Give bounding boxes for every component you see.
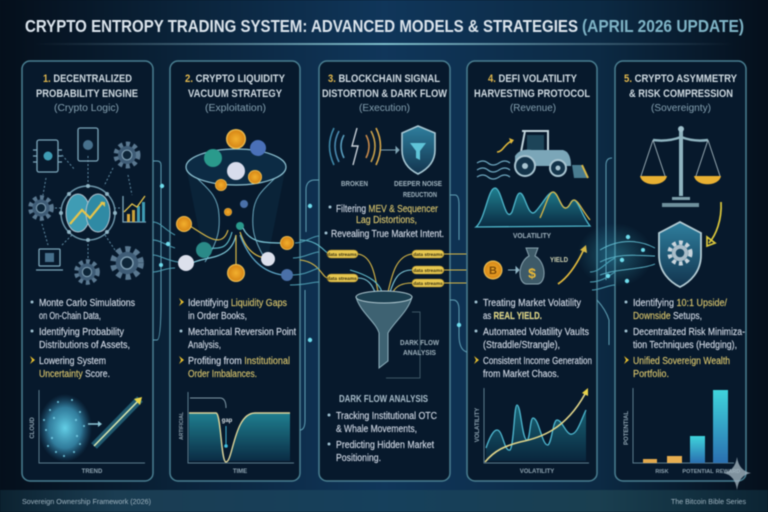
icon: laptop [36,249,63,270]
heading: panel 3: DISTORTION & DARK FLOW [322,88,448,100]
heading: panel 4 [474,73,590,114]
panel: decentralized probability engine [22,61,153,481]
icon: liquidity funnel with coins [176,129,294,282]
subheading: dark flow analysis: DARK FLOW ANALYSIS [339,394,428,405]
icon: mini chart [123,196,146,222]
chart: risk vs reward bars: RISK [655,469,669,475]
bullets: panel 1: Lowering System [39,356,106,367]
footer text: The Bitcoin Bible Series [671,497,746,506]
icon: shield with gear [659,222,701,287]
chart: volatility yield [475,388,589,475]
icon: coin and yield bag [484,245,587,284]
footer text [22,497,746,506]
icon: coin and yield bag: $ [528,265,536,281]
footer text: Sovereign Ownership Framework (2026) [22,497,151,506]
bullets: panel 4: (Straddle/Strangle), [483,340,560,351]
bullets: panel 4: from Market Chaos. [483,369,559,380]
icon: brain network [31,128,146,282]
bullets: panel 2: Profiting from Institutional [188,356,290,367]
bullets: panel 3 top [324,204,444,240]
label: dark flow callout [400,340,439,357]
heading: panel 4: HARVESTING PROTOCOL [474,88,590,100]
heading: panel 1: 1. DECENTRALIZED [43,73,132,85]
chart: cloud to trend [30,390,145,475]
bullets: panel 5: Decentralized Risk Minimiza- [633,327,745,338]
heading: panel 2: (Exploitation) [205,103,266,114]
chart: liquidity gap: ARTIFICIAL [179,412,185,440]
heading: panel 2: 2. CRYPTO LIQUIDITY [185,73,286,85]
icon: tractor over waves [477,131,588,179]
arrow: signal to shield [381,147,399,153]
bullets: panel 4 [474,298,592,380]
panel: crypto asymmetry and risk compression [615,61,746,481]
data streams into funnel: data streams [327,252,357,258]
labels: signal: DEEPER NOISE [394,179,442,188]
bullets: panel 5: Identifying 10:1 Upside/ [633,298,727,309]
heading: panel 3: (Execution) [359,103,410,114]
chart: risk vs reward bars: REWARD [716,469,740,475]
data streams into funnel: data streams [327,276,357,282]
bullets: panel 1: Identifying Probability [39,327,124,338]
panel: blockchain signal distortion and dark flow [300,61,482,481]
bullets: panel 3 bottom [328,411,437,464]
bullets: panel 3 top: Filtering MEV & Sequencer [336,204,439,215]
footer band [0,490,768,512]
icon: dark flow funnel [356,291,420,378]
arrow: scales to shield [707,202,721,246]
bullets: panel 3 bottom: Predicting Hidden Market [336,440,434,451]
bullets: panel 5: Portfolio. [633,369,669,380]
bullets: panel 4: as REAL YIELD. [483,311,542,322]
chart: risk vs reward bars: POTENTIAL [624,411,630,445]
icon: coin and yield bag: YIELD [550,255,569,264]
bullets: panel 4: Automated Volatility Vaults [483,327,589,338]
heading: panel 4: (Revenue) [510,103,556,114]
heading: panel 5: (Sovereignty) [651,103,711,114]
panel: crypto liquidity vacuum strategy [170,61,300,481]
chart: risk vs reward bars: POTENTIAL [682,469,714,475]
icon: broken signal [330,128,380,165]
chart: liquidity gap: TIME [233,469,247,475]
chart: cloud to trend: TREND [82,469,103,475]
heading: panel 5: 5. CRYPTO ASYMMETRY [624,73,738,85]
heading: panel 2: VACUUM STRATEGY [188,88,283,100]
label: dark flow callout: DARK FLOW [400,340,439,347]
data streams into funnel [300,240,482,292]
bullets: panel 3 top: Lag Distortions, [356,215,417,226]
icon: phone [78,128,98,161]
labels: signal: REDUCTION [403,190,437,199]
bullets: panel 2: Analysis, [188,340,221,351]
bullets: panel 1: Distributions of Assets, [39,340,130,351]
bullets: panel 4: Consistent Income Generation [483,356,592,367]
bullets: panel 3 bottom: & Whale Movements, [336,424,417,435]
bullets: panel 3 bottom: Positioning. [336,453,381,464]
bullets: panel 1: Uncertainty Score. [39,369,110,380]
icon: sparkle watermark [723,457,751,490]
bullets: panel 5: tion Techniques (Hedging), [633,340,737,351]
heading: panel 1: (Crypto Logic) [54,103,119,114]
bullets: panel 5 [624,298,745,380]
connector: circuit lines between panels [153,158,655,430]
heading: panel 4: 4. DEFI VOLATILITY [488,73,578,85]
chart: cloud to trend: CLOUD [30,417,36,439]
label: dark flow callout: ANALYSIS [403,350,436,357]
heading: panel 3 [322,73,448,114]
panel: defi volatility harvesting protocol [467,61,597,481]
bullets: panel 2: Identifying Liquidity Gaps [188,298,287,309]
bullets: panel 5: Downside Setups, [633,311,702,322]
chart: risk vs reward bars [624,388,740,475]
bullets: panel 5: Unified Sovereign Wealth [633,356,730,367]
bullets: panel 3 top: Revealing True Market Intent. [331,229,444,240]
bullets: panel 4: Treating Market Volatility [483,298,581,309]
bullets: panel 2: in Order Books, [188,311,247,322]
bullets: panel 1 [30,298,135,380]
heading: panel 5 [624,73,738,114]
bullets: panel 2: Order Imbalances. [188,369,257,380]
heading: panel 1: PROBABILITY ENGINE [36,88,138,100]
bullets: panel 3 bottom: Tracking Institutional OTC [336,411,437,422]
icon: shield with filter [402,126,435,174]
bullets: panel 2 [179,298,296,380]
data streams into funnel: data streams [413,281,443,287]
heading: panel 1 [36,73,138,114]
bullets: panel 2: Mechanical Reversion Point [188,327,296,338]
icon: coin and yield bag: B [489,265,497,277]
icon: balance scales [640,126,721,207]
icon: chip [33,140,62,172]
labels: signal [341,179,442,199]
data streams into funnel: data streams [413,268,443,274]
heading: panel 3: 3. BLOCKCHAIN SIGNAL [328,73,440,85]
heading: panel 2 [185,73,286,114]
chart: volatility waves: VOLATILITY [513,231,551,240]
title: (APRIL 2026 UPDATE) [582,16,744,36]
chart: volatility yield: VOLATILITY [520,469,554,475]
data streams into funnel: data streams [413,252,443,258]
chart: volatility waves [476,188,590,240]
heading: panel 5: & RISK COMPRESSION [629,88,733,100]
chart: liquidity gap: gap [222,418,233,424]
bullets: panel 1: on On-Chain Data, [39,311,101,322]
bullets: panel 1: Monte Carlo Simulations [39,298,135,309]
chart: liquidity gap [179,392,294,475]
title: CRYPTO ENTROPY TRADING SYSTEM: ADVANCED MODELS & STRATEGIES [25,16,578,36]
chart: volatility yield: VOLATILITY [475,408,481,442]
labels: signal: BROKEN [341,179,368,188]
